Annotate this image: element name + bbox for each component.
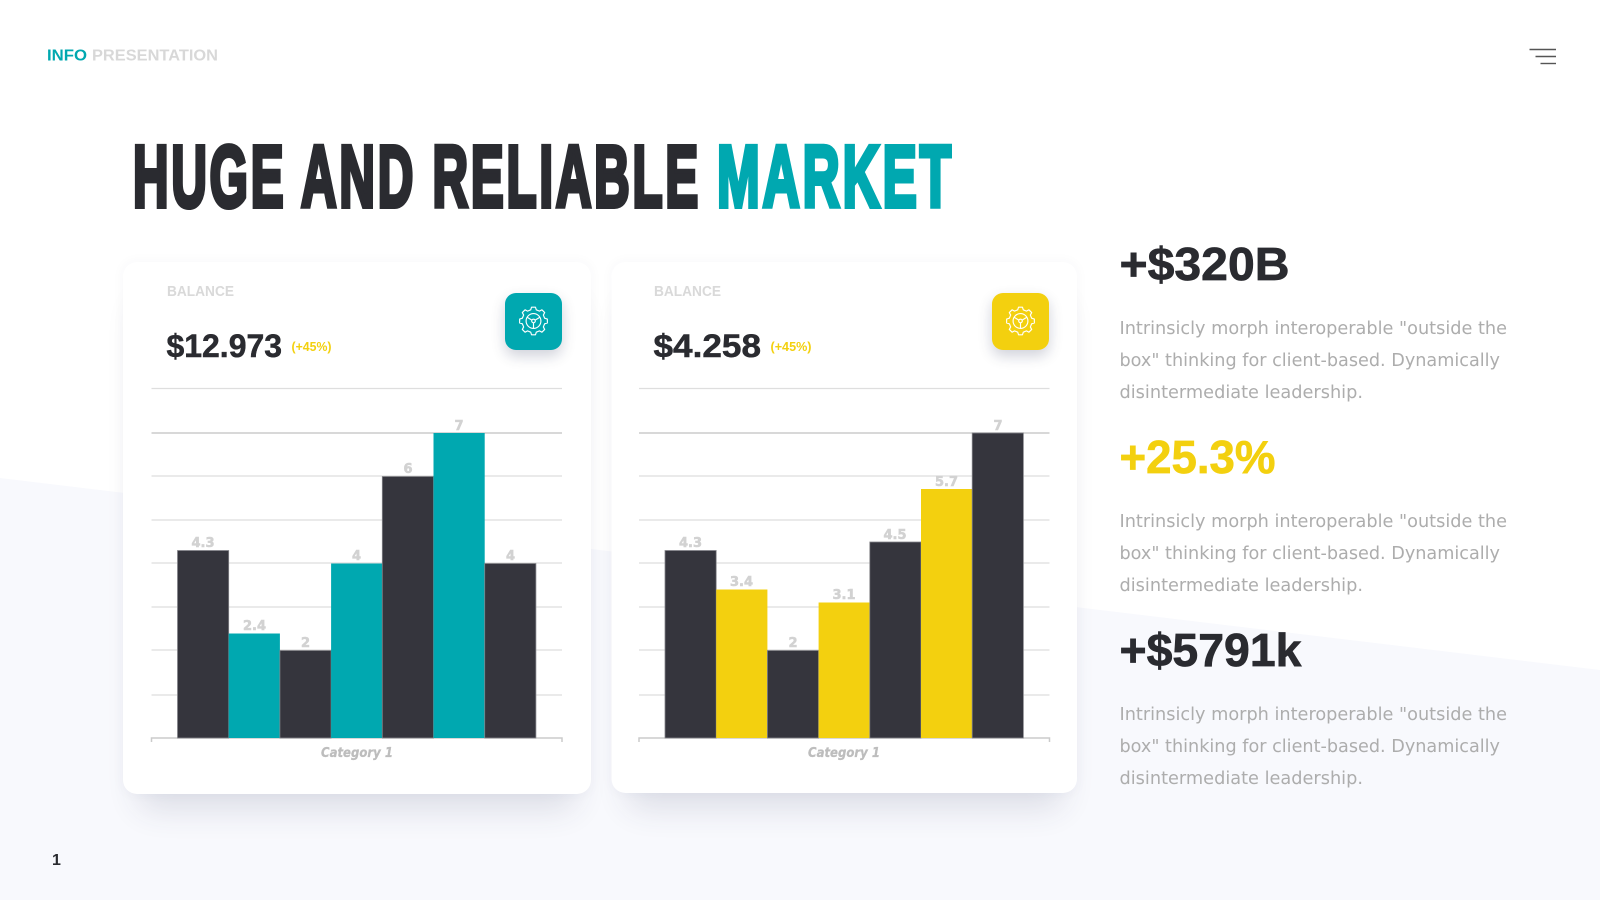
- card label: BALANCE: [654, 284, 721, 300]
- balance amount: $12.973: [166, 328, 282, 364]
- stat description: box" thinking for client-based. Dynamically: [1120, 737, 1500, 757]
- panel: balance card teal: [120, 259, 594, 810]
- stat value: +$5791k: [1120, 624, 1302, 676]
- bar chart teal: 2: [301, 636, 310, 651]
- icon: gear badge yellow: [992, 293, 1049, 356]
- bar chart teal: 7: [454, 419, 464, 434]
- bar chart teal: [152, 388, 562, 761]
- stat description: disintermediate leadership.: [1120, 383, 1363, 403]
- bar chart yellow: 3.4: [730, 575, 753, 590]
- stat block 1: [1120, 238, 1507, 403]
- header label: INFO: [47, 48, 87, 64]
- bar chart teal: 4: [506, 549, 515, 564]
- bar chart teal: 4: [352, 549, 361, 564]
- bar chart teal: 6: [403, 462, 413, 477]
- stat block 3: [1120, 624, 1507, 789]
- stat description: disintermediate leadership.: [1120, 576, 1363, 596]
- stat description: Intrinsicly morph interoperable "outside the: [1120, 705, 1507, 725]
- stat value: +25.3%: [1120, 431, 1276, 483]
- bar chart yellow: [639, 388, 1050, 761]
- icon: gear badge teal: [505, 293, 562, 356]
- stat description: Intrinsicly morph interoperable "outside the: [1120, 319, 1507, 339]
- bar chart teal: 2.4: [243, 619, 266, 634]
- stat block 2: [1120, 431, 1507, 596]
- bar chart yellow: 3.1: [832, 588, 856, 603]
- stat value: +$320B: [1120, 238, 1290, 290]
- panel: balance card yellow: [609, 259, 1080, 809]
- bar chart yellow: Category 1: [808, 746, 880, 761]
- bar chart yellow: 2: [788, 636, 798, 651]
- bar chart yellow: 7: [993, 419, 1003, 434]
- balance change: (+45%): [770, 340, 812, 354]
- bar chart yellow: 5.7: [935, 475, 958, 490]
- title: MARKET: [717, 128, 954, 226]
- stat description: box" thinking for client-based. Dynamically: [1120, 351, 1500, 371]
- card label: BALANCE: [167, 284, 234, 300]
- page number: 1: [52, 852, 61, 869]
- icon: menu: [1530, 50, 1556, 64]
- stat description: [1120, 512, 1507, 596]
- balance amount: $4.258: [654, 328, 761, 364]
- stat description: [1120, 705, 1507, 789]
- bar chart yellow: 4.5: [883, 528, 907, 543]
- balance change: (+45%): [292, 340, 332, 354]
- bar chart yellow: 4.3: [679, 536, 702, 551]
- stat description: [1120, 319, 1507, 403]
- stat description: box" thinking for client-based. Dynamically: [1120, 544, 1500, 564]
- header label: PRESENTATION: [92, 48, 218, 64]
- stat description: disintermediate leadership.: [1120, 769, 1363, 789]
- stat description: Intrinsicly morph interoperable "outside the: [1120, 512, 1507, 532]
- bar chart teal: Category 1: [321, 746, 393, 761]
- title: HUGE AND RELIABLE: [133, 128, 701, 226]
- bar chart teal: 4.3: [191, 536, 215, 551]
